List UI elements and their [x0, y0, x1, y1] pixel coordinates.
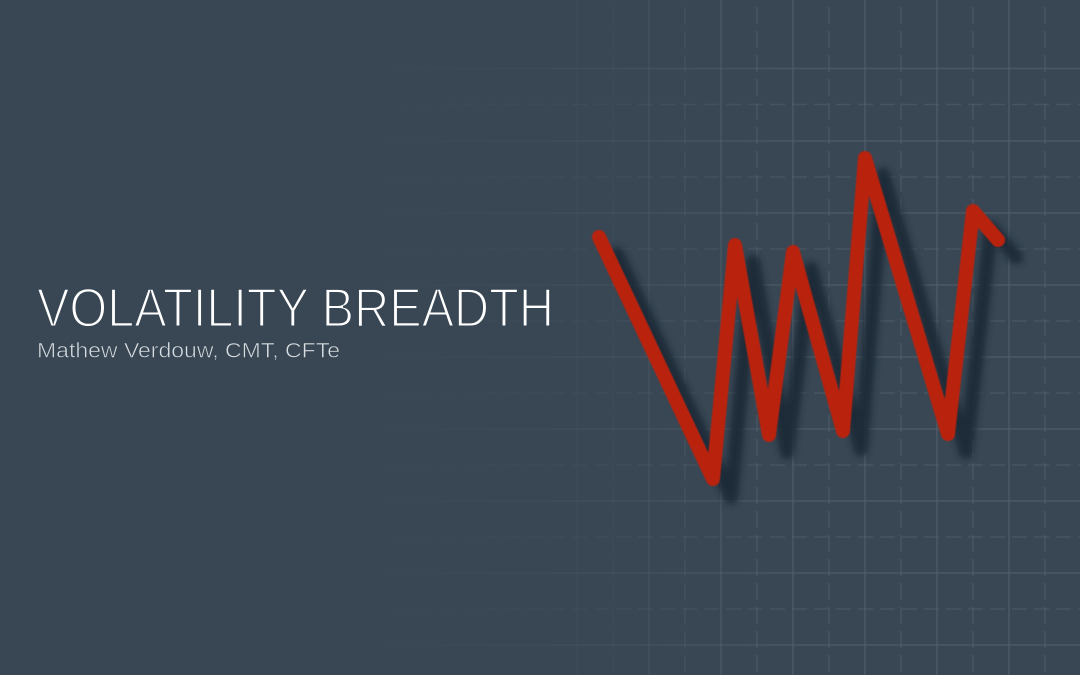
background grid — [576, 0, 1080, 675]
red volatility line chart — [599, 158, 998, 479]
title: VOLATILITY BREADTH — [37, 278, 554, 338]
chart line shadow — [617, 175, 1016, 497]
author subtitle: Mathew Verdouw, CMT, CFTe — [37, 338, 340, 362]
